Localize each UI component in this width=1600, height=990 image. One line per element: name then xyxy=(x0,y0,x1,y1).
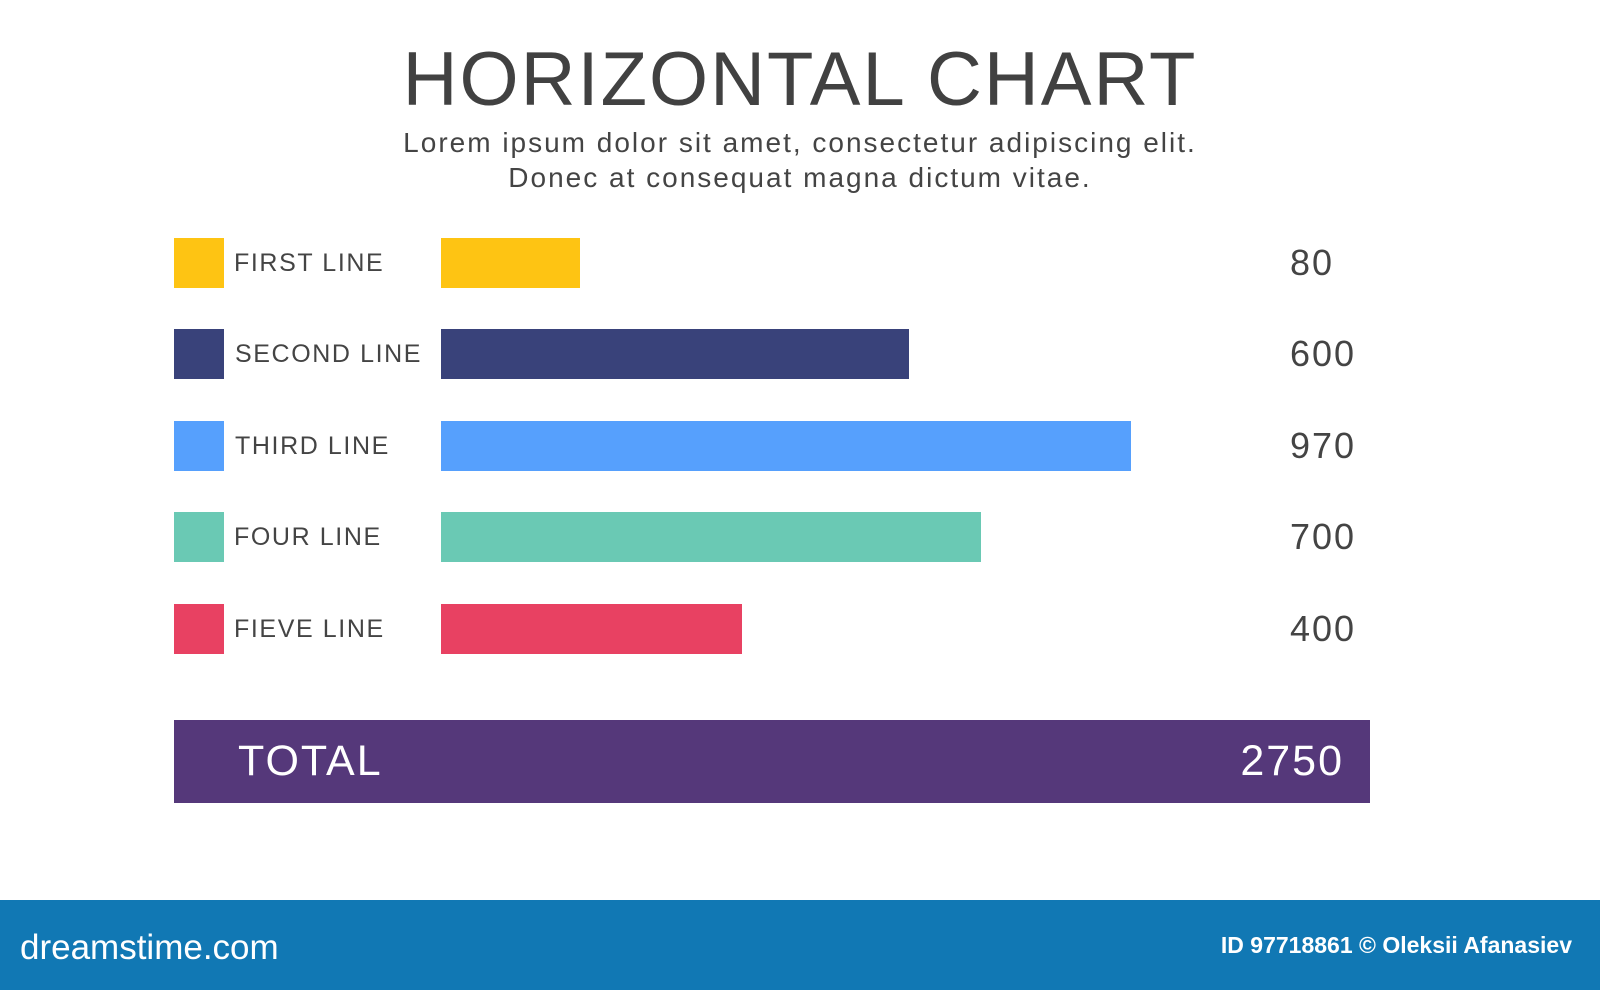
legend swatch xyxy=(174,421,224,471)
legend swatch xyxy=(174,512,224,562)
total label: TOTAL xyxy=(238,737,383,785)
value: 700 xyxy=(1290,516,1356,557)
footer credit: ID 97718861 © Oleksii Afanasiev xyxy=(1221,932,1572,958)
bar xyxy=(441,421,1131,471)
legend swatch xyxy=(174,329,224,379)
label: FIEVE LINE xyxy=(234,615,385,643)
label: THIRD LINE xyxy=(235,432,390,460)
subtitle xyxy=(403,127,1197,193)
subtitle: Lorem ipsum dolor sit amet, consectetur adipiscing elit. xyxy=(403,127,1197,158)
legend swatch xyxy=(174,604,224,654)
value: 600 xyxy=(1290,333,1356,374)
bar xyxy=(441,329,909,379)
footer logo: dreamstime.com xyxy=(20,928,279,967)
row: third line xyxy=(174,421,1356,471)
value: 80 xyxy=(1290,242,1334,283)
row: four line xyxy=(174,512,1356,562)
legend swatch xyxy=(174,238,224,288)
footer xyxy=(0,900,1600,990)
row: first line xyxy=(174,238,1334,288)
total value: 2750 xyxy=(1240,737,1344,785)
title: HORIZONTAL CHART xyxy=(403,37,1197,122)
bar xyxy=(441,238,580,288)
label: SECOND LINE xyxy=(235,340,422,368)
total bar xyxy=(174,720,1370,803)
row: second line xyxy=(174,329,1356,379)
bar xyxy=(441,604,742,654)
label: FOUR LINE xyxy=(234,523,382,551)
row: fieve line xyxy=(174,604,1356,654)
subtitle: Donec at consequat magna dictum vitae. xyxy=(508,162,1092,193)
value: 400 xyxy=(1290,608,1356,649)
value: 970 xyxy=(1290,425,1356,466)
bar xyxy=(441,512,981,562)
label: FIRST LINE xyxy=(234,249,384,277)
